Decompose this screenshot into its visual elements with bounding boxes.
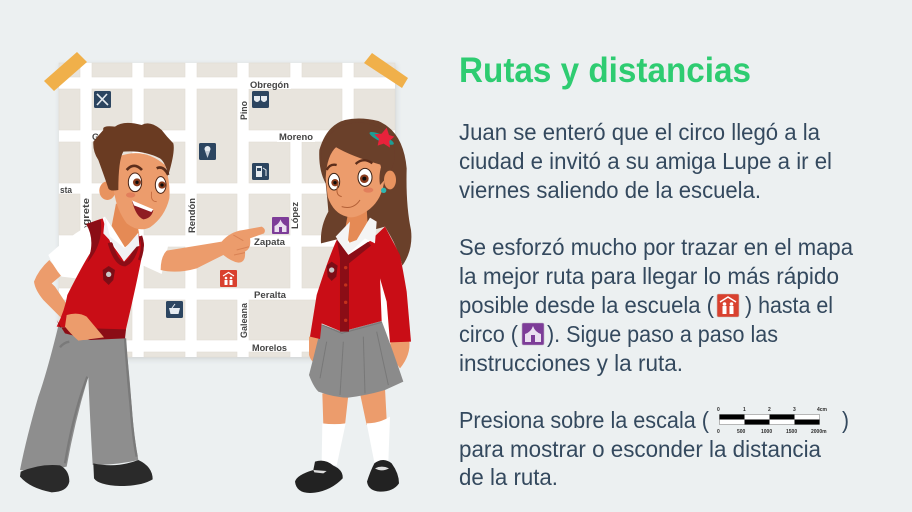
girl eyebrows bbox=[327, 160, 372, 170]
text block: scale paragraph: de la ruta. bbox=[459, 464, 558, 490]
girl socks bbox=[322, 417, 390, 466]
boy left arm bbox=[34, 260, 104, 340]
boy teeth bbox=[132, 200, 153, 212]
street names bbox=[60, 78, 315, 354]
icon: school on map bbox=[220, 270, 237, 287]
boy pointing arm bbox=[161, 227, 265, 272]
boy neck bbox=[112, 203, 139, 247]
girl badge bbox=[327, 262, 338, 281]
icon: circus inline bbox=[522, 323, 544, 345]
scale bar: 2 bbox=[768, 407, 771, 413]
text block: intro paragraph: viernes saliendo de la escuela. bbox=[459, 177, 761, 203]
boy badge crest bbox=[106, 272, 111, 277]
girl buttons bbox=[344, 266, 347, 322]
icon: restaurant bbox=[94, 91, 111, 108]
icon: theater masks bbox=[252, 91, 269, 108]
girl skirt bbox=[309, 321, 403, 398]
street names: Zapata bbox=[254, 237, 286, 248]
scale bar: 0 bbox=[717, 429, 720, 435]
girl nose and mouth bbox=[337, 183, 360, 207]
girl ear bbox=[384, 171, 396, 189]
boy collar bbox=[103, 217, 139, 262]
street names: Negrete bbox=[81, 198, 92, 240]
text block: intro paragraph: ciudad e invitó a su amiga Lupe a ir el bbox=[459, 148, 832, 174]
text block: scale paragraph: ) bbox=[842, 407, 849, 433]
girl cardigan bbox=[310, 227, 411, 342]
scale bar: 1500 bbox=[786, 429, 797, 435]
character: girl Lupe bbox=[295, 119, 411, 493]
girl shoe highlights bbox=[313, 467, 389, 473]
girl shoes bbox=[295, 460, 399, 493]
street names: sta bbox=[60, 185, 73, 196]
scale bar: 1 bbox=[743, 407, 746, 413]
icon: fuel station bbox=[252, 163, 269, 180]
boy vest bbox=[57, 218, 144, 333]
girl eyes bbox=[328, 168, 372, 190]
boy mouth bbox=[132, 201, 153, 219]
text block: intro paragraph: Juan se enteró que el circo llegó a la bbox=[459, 119, 821, 145]
boy vest trim bbox=[57, 219, 142, 340]
text block: route paragraph: Se esforzó mucho por trazar en el mapa bbox=[459, 234, 854, 260]
scale bar: 500 bbox=[737, 429, 746, 435]
icon: circus on map bbox=[272, 217, 289, 234]
icon: school inline bbox=[717, 294, 739, 317]
street names: Rendón bbox=[187, 198, 198, 233]
icon: right tape bbox=[364, 53, 408, 88]
boy eyebrows bbox=[127, 166, 168, 175]
text block: scale paragraph: Presiona sobre la escala ( bbox=[459, 407, 709, 433]
icon: left tape bbox=[44, 52, 87, 91]
boy trouser shading bbox=[60, 338, 137, 463]
text block: route paragraph: posible desde la escuela ( bbox=[459, 292, 714, 318]
text block: route paragraph bbox=[459, 234, 854, 376]
girl legs bbox=[322, 388, 387, 425]
text block: route paragraph: ). Sigue paso a paso las bbox=[547, 321, 778, 347]
girl skirt pleats bbox=[320, 322, 388, 395]
street names: Obregón bbox=[250, 80, 289, 91]
street names: Pino bbox=[239, 101, 250, 120]
scale bar: 1000 bbox=[761, 429, 772, 435]
girl neck bbox=[344, 208, 368, 247]
text block: scale paragraph bbox=[459, 407, 849, 490]
girl placket bbox=[337, 239, 371, 332]
text block: route paragraph: la mejor ruta para llegar lo más rápido bbox=[459, 263, 839, 289]
panel: street map bbox=[59, 63, 395, 357]
boy trousers bbox=[20, 326, 138, 471]
girl face bbox=[326, 147, 384, 217]
boy hair bbox=[93, 123, 174, 191]
boy shoes bbox=[20, 460, 153, 492]
text block: route paragraph: ) hasta el bbox=[745, 292, 833, 318]
map blocks bbox=[59, 63, 395, 357]
girl left hand bbox=[309, 337, 318, 364]
street names: Morelos bbox=[252, 343, 287, 354]
boy nose bbox=[151, 192, 157, 202]
text block: intro paragraph bbox=[459, 119, 832, 203]
text block: route paragraph: circo ( bbox=[459, 321, 518, 347]
boy face bbox=[114, 153, 170, 229]
boy cheeks bbox=[126, 192, 135, 198]
street names: López bbox=[290, 202, 301, 229]
girl badge crest bbox=[329, 267, 334, 273]
scale bar bbox=[717, 407, 828, 435]
boy eyes bbox=[128, 173, 166, 193]
girl collar bbox=[336, 218, 377, 254]
street names: Galeana bbox=[239, 302, 250, 338]
text block: scale paragraph: para mostrar o esconder la distancia bbox=[459, 436, 822, 462]
scale bar: 2000m bbox=[811, 429, 827, 435]
boy badge bbox=[103, 266, 115, 285]
boy shirt bbox=[48, 217, 168, 280]
icon: ice cream bbox=[199, 143, 216, 160]
boy ear bbox=[99, 181, 115, 200]
street names: Moreno bbox=[279, 132, 313, 143]
scale bar: 4cm bbox=[817, 407, 828, 413]
boy hand on hip bbox=[65, 314, 104, 341]
text block: route paragraph: instrucciones y la ruta. bbox=[459, 350, 683, 376]
character: boy Juan bbox=[20, 123, 265, 492]
girl cheeks bbox=[363, 187, 373, 193]
title: Rutas y distancias bbox=[459, 51, 751, 90]
girl long hair bbox=[319, 119, 411, 266]
icon: market basket bbox=[166, 301, 183, 318]
scale bar: 3 bbox=[793, 407, 796, 413]
street names: Peralta bbox=[254, 290, 287, 301]
boy finger lines bbox=[233, 235, 249, 255]
street names: Ga bbox=[92, 132, 105, 143]
girl hair clip bbox=[368, 128, 395, 148]
girl right hand bbox=[390, 340, 410, 368]
girl earring bbox=[381, 188, 386, 193]
scale bar: 0 bbox=[717, 407, 720, 413]
girl fringe bbox=[321, 122, 395, 185]
